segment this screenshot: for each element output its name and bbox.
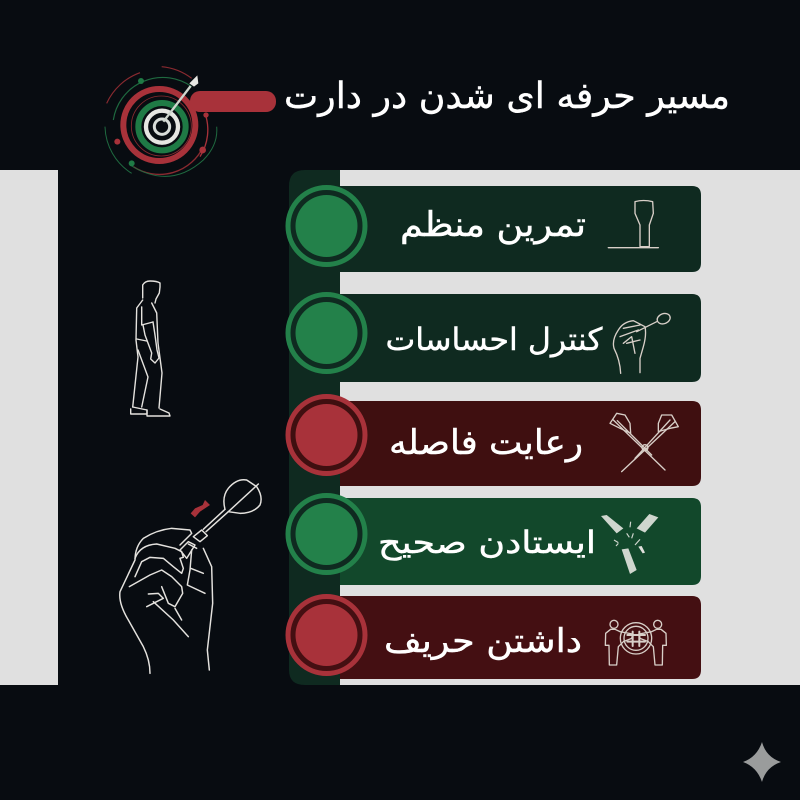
card 1 label: تمرین منظم: [400, 205, 586, 245]
illustration: hand holding dart: [120, 480, 261, 673]
card 5 label: داشتن حریف: [384, 621, 582, 660]
icon: crossed darts: [610, 413, 678, 472]
icon: glass: [608, 200, 658, 248]
card 2 label: کنترل احساسات: [386, 322, 603, 358]
background band left: [0, 170, 58, 685]
icon: dartboard target with dart: [105, 67, 217, 176]
background band right: [340, 170, 800, 685]
card 3: keeping distance: [340, 401, 701, 486]
badge 5 red: [288, 596, 365, 674]
card 2: emotion control: [340, 294, 701, 382]
badge 4 green: [288, 496, 365, 572]
icon: red dart flight accent: [191, 500, 210, 517]
card 3 label: رعایت فاصله: [389, 423, 583, 463]
title pill: [190, 91, 276, 112]
icon: broken darts: [601, 514, 658, 574]
badge 1 green: [288, 188, 365, 264]
figure: standing man outline: [131, 281, 170, 416]
badge 2 green: [288, 294, 365, 372]
badge 3 red: [288, 396, 365, 474]
card 1: regular practice: [340, 186, 701, 272]
title: مسیر حرفه ای شدن در دارت: [284, 76, 730, 117]
vertical spine: [289, 170, 340, 685]
card 4 label: ایستادن صحیح: [378, 525, 596, 561]
icon: four-point sparkle: [743, 742, 781, 782]
card 4: correct stance: [340, 498, 701, 585]
icon: two players with dartboard: [605, 620, 666, 665]
icon: hand with dart: [613, 312, 672, 373]
card 5: having an opponent: [340, 596, 701, 679]
